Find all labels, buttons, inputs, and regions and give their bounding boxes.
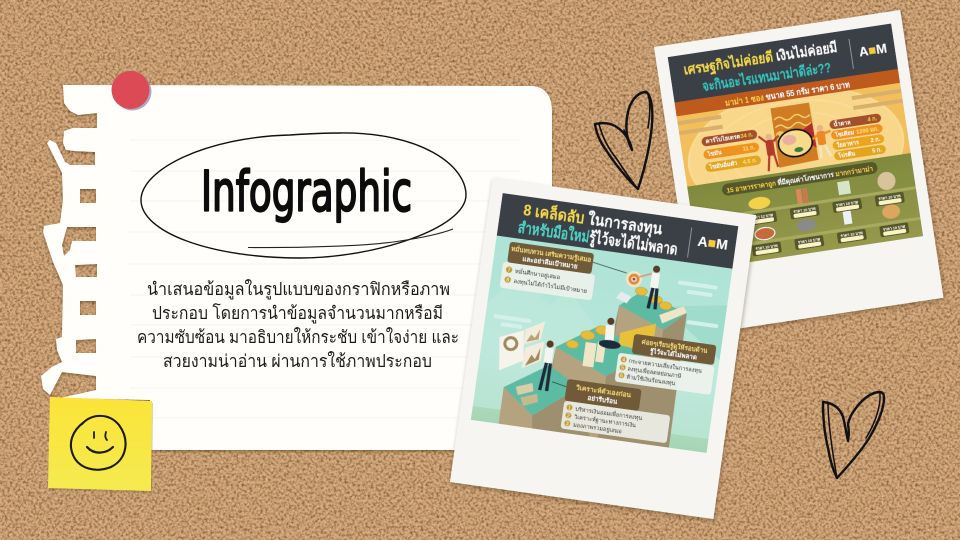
- left nutrition pills: [701, 129, 762, 173]
- tip group: middle: รู้ไว้จะได้ไม่พลาด: [649, 346, 698, 363]
- left nutrition pills: 11 ก.: [742, 144, 756, 153]
- tip group: top: ลงทุนไม่ได้กำไรไม่มีเป้าหมาย: [513, 277, 588, 295]
- logo: A■M: [858, 40, 888, 59]
- right nutrition pills: น้ำตาล: [833, 117, 852, 129]
- heading line 2: สำหรับมือใหม่รู้ไว้จะได้ไม่พลาด: [517, 218, 679, 261]
- title underline stroke: [248, 229, 453, 248]
- tip group: middle: ลงทุนเพื่อลดหย่อนภาษี: [627, 365, 682, 380]
- infographic: 8 investing tips: [471, 193, 738, 453]
- header band: [497, 193, 738, 269]
- steps pillars: [498, 294, 687, 448]
- subheading: จะกินอะไรแทนมาม่าดีล่ะ??: [701, 58, 832, 94]
- noodle background pattern: [678, 88, 904, 186]
- right nutrition pills: 1200 มก.: [856, 125, 880, 136]
- food price labels: ราคา 10 บาท: [755, 243, 778, 251]
- tip group: middle: กระจายความเสี่ยงในการลงทุน: [628, 357, 703, 375]
- tip group: lower: 2: [566, 413, 570, 420]
- header divider: [688, 228, 692, 257]
- orange price band: [674, 69, 900, 116]
- tip group: lower: วิเคราะห์ฐานะทางการเงิน: [573, 413, 637, 429]
- money stacks: [516, 292, 687, 406]
- figure: orange character: [812, 125, 832, 158]
- heading line 1: 8 เคล็ดลับ ในการลงทุน: [522, 199, 664, 240]
- clouds: [494, 280, 718, 329]
- tip group: lower: บริหารเงินออมเพื่อการลงทุน: [575, 405, 643, 422]
- olive food section: [687, 153, 923, 270]
- paper ruled lines: [130, 140, 520, 418]
- tip group: middle: 5: [621, 365, 624, 372]
- tip group: lower: อย่ารีบร้อน: [587, 393, 619, 406]
- left nutrition pills: ไขมันอิ่มตัว: [708, 159, 738, 171]
- description text: ประกอบ โดยการนำข้อมูลจำนวนมากหรือมี: [152, 303, 443, 324]
- infographic: instant noodle nutrition: [668, 23, 923, 270]
- tip group: top: หมั่นศึกษาอยู่เสมอ: [514, 267, 561, 281]
- tip group: lower: [561, 379, 673, 443]
- tip group: middle: ห้ามใช้เงินร้อนลงทุน: [626, 374, 676, 387]
- noodle bowl: [777, 127, 814, 159]
- figure: sitting middle: [598, 317, 621, 350]
- photo card: investing tips infographic: [450, 178, 756, 519]
- tip group: top: [500, 241, 598, 300]
- yellow sticky note with smiley: [48, 397, 153, 493]
- figure: standing lower: [540, 340, 554, 391]
- icon: smiley face: [71, 416, 126, 470]
- tip group: middle: 6: [620, 373, 623, 380]
- noodle pack: [770, 102, 819, 168]
- price text: มาม่า 1 ซอง ขนาด 55 กรัม ราคา 6 บาท: [724, 79, 851, 108]
- tip group: middle: 4: [622, 357, 626, 364]
- food price labels: ราคา 10 บาท: [878, 193, 901, 201]
- header band: [668, 23, 898, 103]
- right nutrition pills: โซเดียม: [834, 128, 855, 139]
- right nutrition pills: 2 ก.: [870, 136, 881, 144]
- food price labels: ราคา 10 บาท: [798, 236, 821, 245]
- right nutrition pills: [829, 113, 886, 161]
- header divider: [849, 39, 853, 69]
- left nutrition pills: 4.5 ก.: [742, 157, 758, 166]
- description text: ความซับซ้อน มาอธิบายให้กระชับ เข้าใจง่าย และ: [137, 327, 459, 347]
- left nutrition pills: 34 ก.: [740, 131, 754, 140]
- red push pin: [112, 71, 152, 110]
- tip group: lower: มองภาพรวมอยู่เสมอ: [573, 422, 622, 435]
- food price labels: ราคา 10 บาท: [840, 230, 863, 238]
- connector lines: [552, 259, 628, 393]
- food price labels: [747, 192, 910, 257]
- photo card: instant noodle infographic: [654, 10, 943, 335]
- tip group: middle: [615, 332, 718, 395]
- coins: [566, 286, 672, 349]
- figure: red character: [758, 134, 780, 172]
- tip group: middle: ค่อยๆเรียนรู้ดูให้รอบด้าน: [641, 337, 709, 356]
- tip group: top: หมั่นทบทวน เสริมความรู้เสมอ: [510, 244, 592, 265]
- olive food section: 15 อาหารราคาถูก ที่มีคุณค่าโภชนาการ มากกว่ามาม่า: [726, 163, 874, 196]
- tip group: lower: 3: [565, 421, 569, 427]
- food price labels: ราคา 10 บาท: [836, 199, 859, 207]
- right nutrition pills: 4 ก.: [867, 115, 878, 124]
- tip group: top: 8: [506, 277, 510, 284]
- food price labels: ราคา 10 บาท: [883, 223, 906, 232]
- title: Infographic: Infographic: [201, 160, 412, 224]
- heading: เศรษฐกิจไม่ค่อยดี เงินไม่ค่อยมี: [682, 38, 838, 80]
- icon: heart doodle upper: [595, 92, 652, 189]
- description text: สวยงามน่าอ่าน ผ่านการใช้ภาพประกอบ: [163, 351, 432, 371]
- tip group: top: และอย่าลืมเป้าหมาย: [522, 254, 578, 271]
- icon: heart doodle lower: [823, 392, 884, 478]
- tip group: top: 7: [507, 268, 511, 274]
- right nutrition pills: 5 ก.: [872, 146, 883, 155]
- left nutrition pills: คาร์โบไฮเดรต: [705, 132, 741, 146]
- torn notebook paper: [41, 85, 552, 450]
- ribbon heading: [721, 161, 878, 196]
- right nutrition pills: ใยอาหาร: [836, 138, 859, 149]
- food icons: [747, 171, 901, 241]
- pale mountains: [473, 288, 713, 439]
- logo: A■M: [697, 233, 729, 253]
- figure: standing top: [639, 265, 660, 310]
- right nutrition pills: โปรตีน: [837, 149, 856, 160]
- hand-drawn oval around title: [141, 133, 466, 258]
- food price labels: ราคา 12 บาท: [750, 212, 774, 220]
- target icon: [626, 271, 642, 288]
- food price labels: ราคา 10 บาท: [793, 206, 816, 214]
- chart panels: [498, 321, 546, 370]
- tip group: lower: 1: [568, 405, 571, 412]
- tip group: lower: วิเคราะห์ตัวเองก่อน: [575, 384, 632, 399]
- description text: นำเสนอข้อมูลในรูปแบบของกราฟิกหรือภาพ: [147, 279, 450, 300]
- gold bars: [618, 324, 656, 348]
- description text: [137, 279, 459, 371]
- left nutrition pills: ไขมัน: [706, 148, 722, 159]
